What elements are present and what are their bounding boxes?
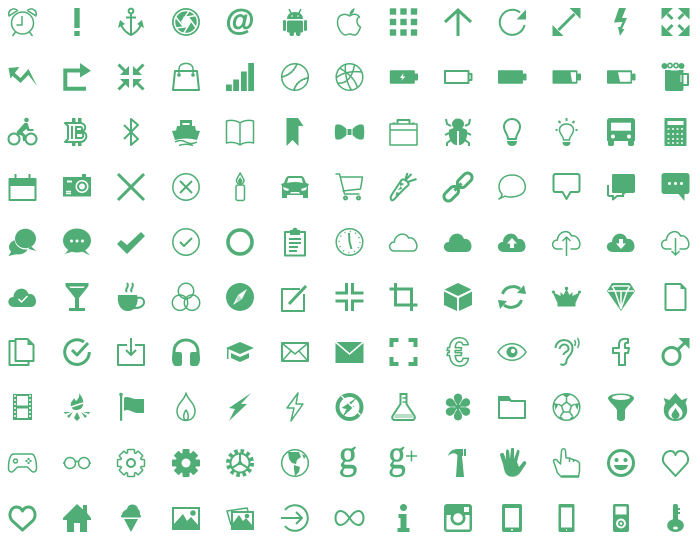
- icon: info i: [398, 504, 410, 532]
- icon: car: [281, 176, 309, 198]
- icon: copy documents: [10, 339, 34, 365]
- icon: speech bubble with dots: [63, 228, 91, 256]
- icon: graduation cap: [226, 342, 254, 362]
- icon: battery half: [607, 70, 636, 84]
- icon: shopping cart: [336, 174, 362, 200]
- icon: male symbol: [663, 338, 690, 364]
- icon: cloud with check: [8, 289, 36, 307]
- icon: cloud filled: [444, 234, 472, 252]
- icon: calendar: [9, 174, 36, 200]
- icon: compass: [226, 283, 254, 311]
- icon: android: [283, 9, 307, 36]
- icon: ship: [172, 120, 200, 146]
- icon: key: [667, 504, 684, 532]
- icon: exclamation mark: [74, 8, 80, 36]
- icon: app grid: [390, 8, 417, 36]
- icon: square speech bubble outline: [554, 174, 580, 199]
- icon: circled check: [173, 229, 199, 255]
- icon: google plus: g: [388, 432, 406, 478]
- icon: open book: [226, 120, 254, 145]
- icon: at sign: @: [226, 4, 254, 37]
- icon: baseball: [282, 64, 308, 90]
- icon: campfire: [64, 393, 90, 421]
- icon: film strip: [13, 394, 32, 420]
- icon: eye: [498, 344, 526, 360]
- icon: no flash circle: [338, 395, 362, 419]
- icon: collapse corners: [336, 283, 364, 311]
- icon: open circle check: [65, 340, 89, 364]
- icon: ear with sound: [556, 338, 579, 365]
- icon: shopping bag: [173, 63, 199, 90]
- icon: google plus: [388, 432, 417, 478]
- icon: battery high: [552, 70, 581, 84]
- icon: camera aperture: [172, 8, 200, 36]
- icon: music player: [613, 504, 629, 532]
- icon: battery full: [498, 70, 526, 84]
- icon: carrot: [391, 173, 416, 200]
- icon: smiley: [608, 450, 634, 476]
- icon: pointing hand: [554, 449, 580, 477]
- icon: expand corners: [392, 340, 416, 364]
- icon: cube: [444, 283, 472, 311]
- icon: lightning filled: [229, 393, 251, 421]
- icon: filled chat bubble with dots: [662, 173, 690, 201]
- icon: cloud outline: [390, 234, 417, 251]
- icon: refresh: [500, 10, 526, 35]
- icon: crop: [390, 283, 418, 311]
- icon: beer mug: [662, 62, 688, 91]
- icon: cloud upload filled: [498, 234, 526, 252]
- icon: gear outline: [118, 450, 144, 476]
- icon: camera: [63, 174, 91, 196]
- icon: speech bubble outline: [499, 175, 525, 199]
- icon: chemistry flask: [392, 394, 415, 420]
- icon: game controller: [8, 454, 36, 472]
- icon: three overlapping circles: [172, 283, 200, 310]
- icon: share arrow: [65, 63, 91, 89]
- icon: home: [63, 504, 91, 532]
- icon: expand arrows: [662, 8, 690, 36]
- icon: resize arrow: [552, 8, 580, 36]
- icon: candle: [236, 173, 244, 200]
- icon: stacked images: [227, 508, 254, 530]
- icon: spoked gear wheel: [228, 451, 252, 475]
- icon: battery empty: [445, 71, 472, 83]
- icon: two speech bubbles: [8, 228, 36, 256]
- icon: tablet: [502, 504, 522, 532]
- icon: signal bars: [226, 63, 254, 91]
- icon: bitcoin: [65, 118, 86, 146]
- icon: bow tie: [335, 124, 364, 140]
- icon: cyclist: [8, 118, 36, 144]
- icon: basketball: [336, 64, 363, 90]
- icon: soccer ball: [553, 394, 580, 420]
- icon: sign in: [281, 505, 308, 531]
- icon: up arrow: [445, 10, 471, 36]
- icon: anchor: [118, 9, 144, 35]
- icon: crown: [552, 287, 581, 306]
- icon: landscape image: [172, 507, 200, 530]
- icon: battery charging: [390, 70, 418, 84]
- icon: mail filled: [336, 342, 364, 363]
- icon: mail outline: [282, 343, 308, 361]
- icon: double chat bubbles: [608, 174, 635, 200]
- icon: headphones: [172, 340, 200, 366]
- icon: light bulb: [504, 119, 520, 146]
- icon: apple: [338, 8, 360, 35]
- icon: cloud download filled: [607, 234, 635, 252]
- icon: sync arrows: [498, 285, 526, 309]
- icon: calculator: [664, 118, 686, 146]
- icon: heart outline thin: [663, 451, 688, 476]
- icon: alarm clock: [9, 9, 36, 36]
- icon: bookmark ribbon: [286, 118, 304, 146]
- icon: flag: [119, 393, 144, 421]
- icon: compress arrows: [118, 64, 144, 90]
- icon: diamond: [607, 283, 635, 311]
- icon: clipboard: [285, 228, 305, 256]
- icon: edit note: [282, 286, 306, 311]
- icon: close cross: [118, 174, 144, 200]
- icon: check mark: [117, 232, 145, 254]
- icon: gear filled: [172, 449, 200, 477]
- icon: cloud upload outline: [553, 232, 580, 256]
- icon: ring circle: [228, 230, 252, 254]
- icon: document: [666, 284, 686, 310]
- icon: download tray: [118, 338, 144, 365]
- icon: ice cream cone: [121, 504, 141, 532]
- icon: lightning flash: [614, 8, 627, 36]
- icon: letter g: g: [339, 432, 357, 477]
- icon: gas flame: [664, 393, 688, 421]
- icon: bluetooth: [124, 119, 138, 145]
- icon: bus: [607, 118, 635, 146]
- icon: coffee cup: [118, 283, 144, 311]
- icon: light bulb with rays: [556, 118, 578, 146]
- icon: lightning outline: [287, 393, 303, 421]
- icon: hammer: [448, 449, 466, 477]
- icon: funnel: [608, 394, 634, 421]
- icon: infinity: [336, 511, 364, 525]
- icon: heart outline thick: [10, 507, 35, 530]
- icon: folder: [498, 396, 525, 418]
- icon: asterisk: [444, 394, 472, 420]
- icon: flame outline: [177, 393, 195, 420]
- icon: chain link: [442, 171, 474, 203]
- icon: martini glass: [66, 283, 88, 311]
- icon: raised hand: [500, 448, 526, 477]
- icon: glasses: [63, 458, 91, 468]
- icon: facebook f: [613, 339, 629, 365]
- icon: circled cross: [173, 174, 199, 200]
- icon: zigzag trend arrow: [8, 67, 37, 86]
- icon: bug: [445, 118, 471, 146]
- icon: instagram: [444, 504, 472, 532]
- icon: briefcase: [390, 120, 417, 145]
- icon: euro sign: €: [447, 330, 469, 374]
- icon: clock: [336, 229, 363, 255]
- icon: phone: [558, 504, 574, 532]
- icon: globe: [282, 450, 308, 476]
- icon: cloud download outline: [662, 232, 689, 255]
